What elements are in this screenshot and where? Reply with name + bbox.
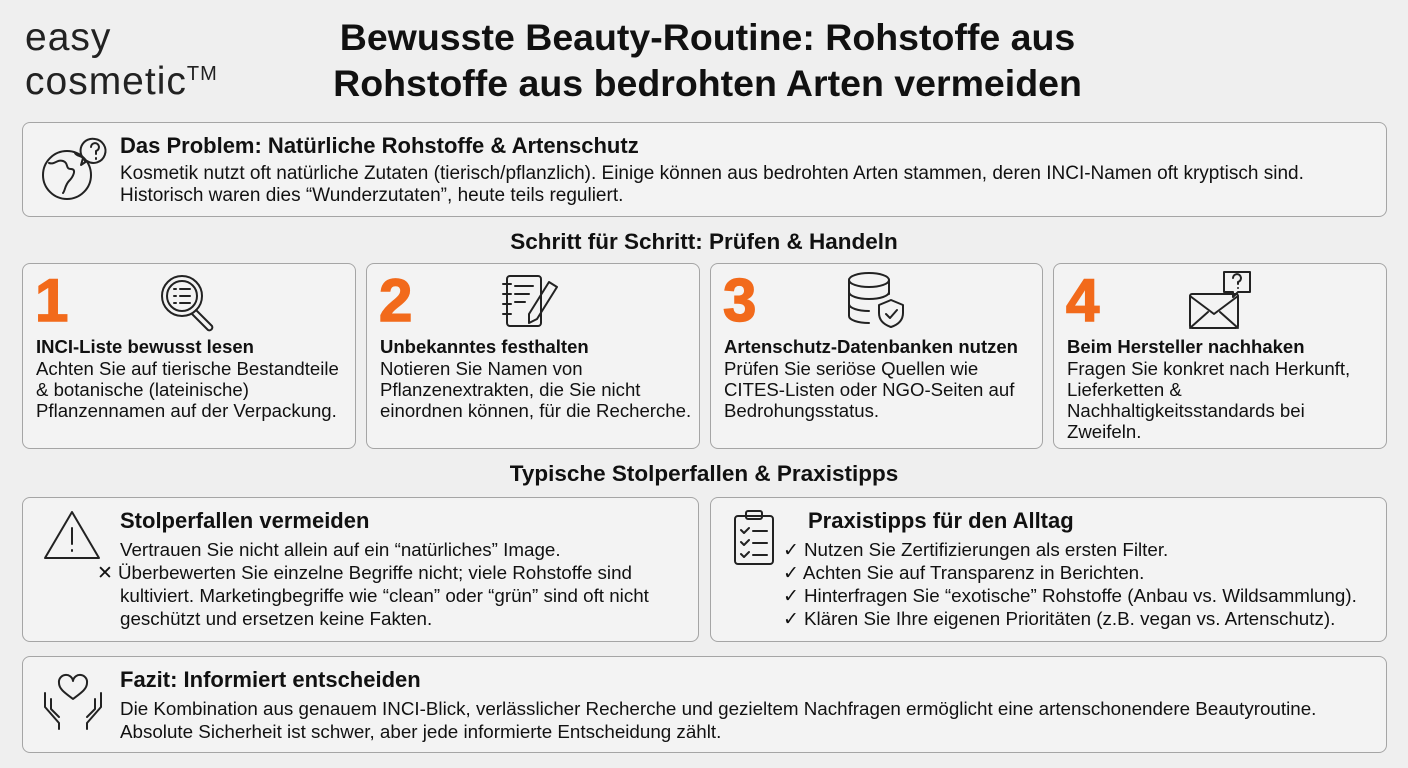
panel: conclusion [22, 656, 1387, 753]
tips text: ✓ Achten Sie auf Transparenz in Berichten. [783, 562, 1144, 583]
step 1: Achten Sie auf tierische Bestandteile [36, 358, 339, 379]
panel: pitfalls: Stolperfallen vermeiden [120, 508, 369, 533]
step 1: INCI-Liste bewusst lesen [36, 336, 254, 357]
tips text [783, 539, 1357, 629]
step 2: Pflanzenextrakten, die Sie nicht [380, 379, 640, 400]
step 4 [1053, 263, 1387, 449]
step 4: Nachhaltigkeitsstandards bei [1067, 400, 1305, 421]
step 3: Bedrohungsstatus. [724, 400, 879, 421]
section heading: steps: Schritt für Schritt: Prüfen & Handeln [510, 229, 898, 254]
tips text: ✓ Nutzen Sie Zertifizierungen als ersten Filter. [783, 539, 1168, 560]
panel: conclusion: Fazit: Informiert entscheiden [120, 667, 421, 692]
panel: tips [710, 497, 1387, 642]
panel: tips: Praxistipps für den Alltag [808, 508, 1074, 533]
icon: globe question [42, 138, 106, 200]
icon: checklist [734, 510, 774, 565]
title: Bewusste Beauty-Routine: Rohstoffe aus [340, 16, 1075, 58]
tips text: ✓ Klären Sie Ihre eigenen Prioritäten (z.B. vegan vs. Artenschutz). [783, 608, 1335, 629]
icon: hands heart [44, 674, 102, 730]
step 3: CITES-Listen oder NGO-Seiten auf [724, 379, 1014, 400]
pitfalls text: ✕ Überbewerten Sie einzelne Begriffe nicht; viele Rohstoffe sind [97, 562, 632, 583]
problem text: Historisch waren dies “Wunderzutaten”, heute teils reguliert. [120, 184, 623, 206]
step 4: Fragen Sie konkret nach Herkunft, [1067, 358, 1350, 379]
step 2: 2 [379, 267, 412, 334]
icon: warning [44, 511, 100, 559]
conclusion text [120, 698, 1316, 742]
step 4: Lieferketten & [1067, 379, 1182, 400]
conclusion text: Absolute Sicherheit ist schwer, aber jede informierte Entscheidung zählt. [120, 721, 721, 742]
icon: notepad [502, 275, 558, 327]
pitfalls text [97, 539, 649, 629]
step 1: & botanische (lateinische) [36, 379, 249, 400]
problem text [120, 163, 1304, 206]
step 2: Notieren Sie Namen von [380, 358, 583, 379]
step 3: Prüfen Sie seriöse Quellen wie [724, 358, 978, 379]
step 3: 3 [723, 267, 756, 334]
step 4: Zweifeln. [1067, 421, 1141, 442]
icon: database shield [848, 272, 904, 328]
title [333, 16, 1082, 104]
step 1 [22, 263, 356, 449]
step 2 [366, 263, 700, 449]
title: Rohstoffe aus bedrohten Arten vermeiden [333, 62, 1082, 104]
conclusion text: Die Kombination aus genauem INCI-Blick, verlässlicher Recherche und gezieltem Nachfragen ermöglicht eine artenschonendere Beautyroutine. [120, 698, 1316, 719]
step 4: Beim Hersteller nachhaken [1067, 336, 1305, 357]
panel: pitfalls [22, 497, 699, 642]
section heading: pitfalls: Typische Stolperfallen & Praxistipps [510, 461, 898, 486]
logo: cosmeticTM [25, 60, 218, 103]
pitfalls text: Vertrauen Sie nicht allein auf ein “natürliches” Image. [120, 539, 561, 560]
step 1: Pflanzennamen auf der Verpackung. [36, 400, 337, 421]
icon: magnifier [161, 275, 214, 332]
step 2: einordnen können, für die Recherche. [380, 400, 691, 421]
tips text: ✓ Hinterfragen Sie “exotische” Rohstoffe (Anbau vs. Wildsammlung). [783, 585, 1357, 606]
step 2: Unbekanntes festhalten [380, 336, 589, 357]
pitfalls text: geschützt und ersetzen keine Fakten. [120, 608, 432, 629]
step 3 [710, 263, 1043, 449]
pitfalls text: kultiviert. Marketingbegriffe wie “clean” oder “grün” sind oft nicht [120, 585, 649, 606]
icon: mail question [1189, 271, 1251, 329]
step 1: 1 [35, 267, 68, 334]
step 4: 4 [1066, 267, 1099, 334]
problem text: Kosmetik nutzt oft natürliche Zutaten (tierisch/pflanzlich). Einige können aus bedrohten Arten stammen, deren INCI-Namen oft kryptisch sind. [120, 163, 1304, 184]
logo: easy [25, 16, 111, 59]
step 3: Artenschutz-Datenbanken nutzen [724, 336, 1018, 357]
panel: problem [22, 122, 1387, 217]
logo [25, 16, 218, 103]
problem heading: Das Problem: Natürliche Rohstoffe & Artenschutz [120, 133, 639, 158]
